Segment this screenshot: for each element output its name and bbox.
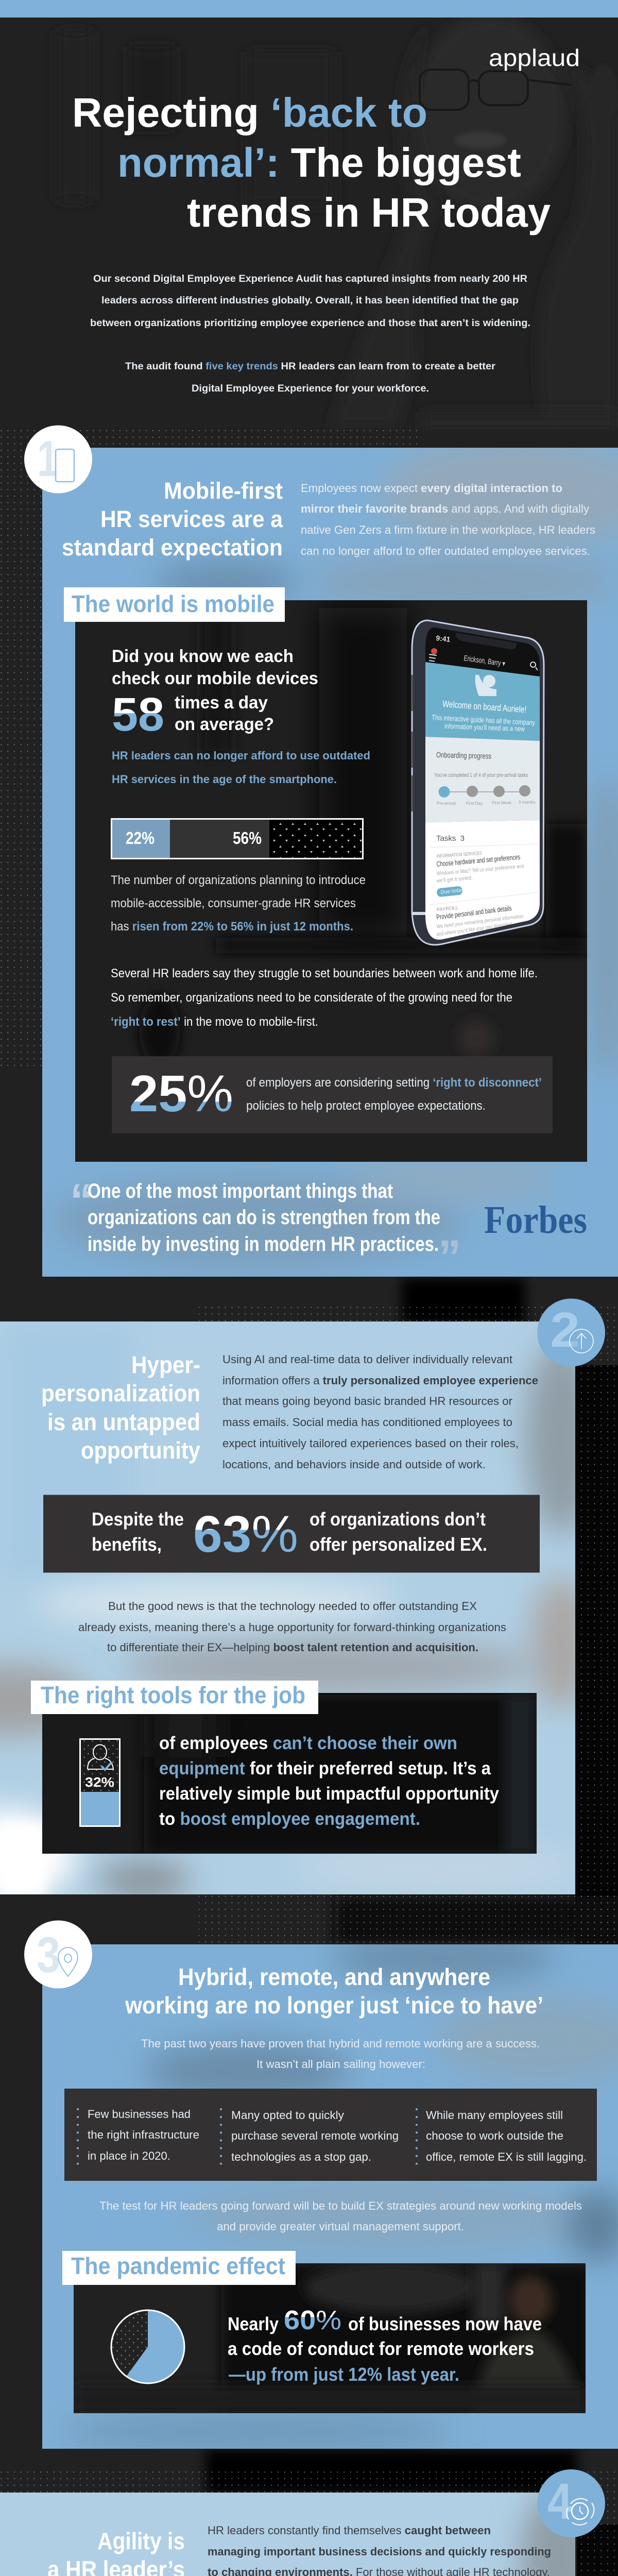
phone mockup: Due today xyxy=(440,887,465,895)
good news text: But the good news is that the technology needed to offer outstanding EX xyxy=(108,1600,477,1613)
equipment statement: of employees can’t choose their own xyxy=(159,1733,457,1753)
phone mockup xyxy=(411,620,544,948)
column 3: While many employees still xyxy=(426,2109,563,2122)
section 4 text: managing important business decisions and quickly responding xyxy=(208,2545,551,2558)
section 3 text: The past two years have proven that hybrid and remote working are a success. xyxy=(141,2037,540,2050)
intro text: leaders across different industries globally. Overall, it has been identified that the gap xyxy=(101,295,519,306)
stat explanation: The number of organizations planning to introduce xyxy=(111,873,366,887)
section 2 text xyxy=(222,1353,538,1471)
right to rest text: Several HR leaders say they struggle to set boundaries between work and home life. xyxy=(111,967,538,980)
section 2 text: that means going beyond basic branded HR resources or xyxy=(222,1395,512,1408)
tab: the right tools: The right tools for the job xyxy=(41,1682,305,1708)
pandemic statement: —up from just 12% last year. xyxy=(229,2364,459,2385)
did you know text: Did you know we each xyxy=(112,647,294,666)
right to rest text xyxy=(111,967,538,1029)
pandemic statement xyxy=(228,2306,542,2385)
phone mockup: We need your remaining personal information xyxy=(436,913,524,930)
column 2: purchase several remote working xyxy=(231,2129,399,2142)
tab: the pandemic effect: The pandemic effect xyxy=(71,2252,285,2279)
EX strategy text: and provide greater virtual management support. xyxy=(217,2220,464,2233)
logo: Forbes: Forbes xyxy=(484,1198,587,1242)
stat box: 63%: Despite the xyxy=(92,1509,184,1530)
pandemic statement: 60% xyxy=(284,2306,341,2335)
blue statement: HR services in the age of the smartphone. xyxy=(112,773,337,786)
good news text: to differentiate their EX—helping boost talent retention and acquisition. xyxy=(107,1641,478,1654)
section 2 heading: opportunity xyxy=(81,1437,200,1464)
section 1 text: can no longer afford to offer outdated employee services. xyxy=(301,545,590,557)
blue statement: HR leaders can no longer afford to use outdated xyxy=(112,749,370,762)
did you know text: check our mobile devices xyxy=(112,669,318,688)
title: trends in HR today xyxy=(187,190,551,235)
title: normal’: The biggest xyxy=(117,140,521,185)
badge: trend 2 xyxy=(537,1298,605,1366)
panel: pandemic effect xyxy=(74,2262,592,2413)
section 1 heading: Mobile-first xyxy=(164,478,283,504)
quote: “ xyxy=(70,1175,93,1227)
three-column box xyxy=(64,2089,597,2181)
phone mockup: Choose hardware and set preferences xyxy=(436,853,521,868)
pie chart: 60% xyxy=(111,2310,184,2383)
phone mockup: This interactive guide has all the company xyxy=(432,713,535,727)
did you know text: on average? xyxy=(175,715,274,734)
section 1 heading: standard expectation xyxy=(62,534,283,561)
pandemic statement: Nearly xyxy=(228,2313,279,2334)
phone mockup: PAYROLL xyxy=(436,905,459,913)
stat box: 25% xyxy=(112,1056,553,1133)
intro text: The audit found five key trends HR leaders can learn from to create a better xyxy=(125,361,496,372)
did you know text: 58 xyxy=(112,688,164,741)
icon: 32% person gauge: 32% xyxy=(85,1774,114,1790)
panel: trend 3 hybrid working xyxy=(42,1932,618,2452)
phone mockup: Welcome on board Auriele! xyxy=(442,699,527,715)
section 2 heading xyxy=(41,1351,200,1464)
phone mockup: Provide personal and bank details xyxy=(436,904,512,921)
phone mockup: we’ll get it sorted. xyxy=(436,875,473,884)
bar chart: 22% to 56% xyxy=(111,819,363,858)
intro text: between organizations prioritizing employee experience and those that aren’t is widening. xyxy=(90,318,530,329)
panel: trend 4 agility xyxy=(0,2488,603,2576)
column 2: technologies as a stop gap. xyxy=(231,2150,371,2163)
stat box: 25%: 25% xyxy=(129,1065,233,1123)
section 3 heading xyxy=(125,1963,543,2019)
stat explanation: mobile-accessible, consumer-grade HR services xyxy=(111,896,356,910)
quote: ” xyxy=(438,1231,461,1283)
section 2 heading: is an untapped xyxy=(47,1409,200,1435)
stat box: 25%: of employers are considering setting ‘right to disconnect’ xyxy=(246,1076,542,1090)
section 4 text: HR leaders constantly find themselves caught between xyxy=(208,2524,491,2537)
equipment statement: to boost employee engagement. xyxy=(159,1809,420,1829)
phone mockup: information you’ll need as a new xyxy=(444,722,525,733)
pandemic statement: a code of conduct for remote workers xyxy=(228,2338,534,2359)
section 3 text xyxy=(141,2037,540,2071)
panel: right tools for the job xyxy=(42,1693,541,1855)
bar chart: 22% to 56%: 22% xyxy=(126,828,154,848)
good news text xyxy=(78,1600,506,1654)
section 4 text xyxy=(208,2524,551,2576)
badge: trend 1: 1 xyxy=(37,430,59,487)
phone mockup: Erickson, Barry ▾ xyxy=(463,654,506,668)
right to rest text: So remember, organizations need to be considerate of the growing need for the xyxy=(111,991,512,1005)
stat box: 63%: 63% xyxy=(193,1505,298,1563)
column 3 xyxy=(426,2109,587,2163)
section 2 text: locations, and behaviors inside and outside of work. xyxy=(222,1458,486,1471)
title: Rejecting ‘back to xyxy=(72,90,427,135)
top colour bar xyxy=(0,0,618,18)
section 1 text: native Gen Zers a firm fixture in the workplace, HR leaders xyxy=(301,523,595,536)
column 1: Few businesses had xyxy=(88,2108,191,2121)
icon: 32% person gauge xyxy=(80,1739,119,1826)
EX strategy text xyxy=(99,2199,582,2233)
phone mockup: You’ve completed 1 of 4 of your pre-arrival tasks xyxy=(434,772,528,778)
phone mockup: Tasks 3 xyxy=(436,834,465,843)
did you know text: times a day xyxy=(175,693,268,713)
pandemic statement: of businesses now have xyxy=(348,2313,542,2334)
phone mockup: First Day xyxy=(466,801,483,806)
tab: the world is mobile: The world is mobile xyxy=(72,590,274,617)
column 2 xyxy=(231,2109,399,2163)
section 4 heading: Agility is xyxy=(97,2528,185,2554)
stat box: 25%: policies to help protect employee expectations. xyxy=(246,1099,486,1113)
phone mockup: Windows or Mac? Tell us your preference and xyxy=(436,863,524,877)
good news text: already exists, meaning there’s a huge opportunity for forward-thinking organizations xyxy=(78,1621,506,1634)
stat explanation xyxy=(111,873,366,934)
blue statement xyxy=(112,749,370,786)
section 1 text: Employees now expect every digital interaction to xyxy=(301,482,562,495)
column 1 xyxy=(88,2108,199,2162)
hero background photo xyxy=(57,15,618,433)
section 1 heading xyxy=(62,478,283,561)
equipment statement xyxy=(159,1733,499,1829)
section 3 text: It wasn’t all plain sailing however: xyxy=(256,2058,425,2071)
column 3: choose to work outside the xyxy=(426,2129,563,2142)
intro text: Digital Employee Experience for your workforce. xyxy=(192,383,429,394)
quote: inside by investing in modern HR practices. xyxy=(88,1233,439,1256)
stat box: 63% xyxy=(43,1495,540,1572)
logo: applaud top: applaud xyxy=(489,44,580,71)
section 3 heading: Hybrid, remote, and anywhere xyxy=(178,1963,490,1990)
section 1 text: mirror their favorite brands and apps. And with digitally xyxy=(301,502,589,515)
section 2 text: Using AI and real-time data to deliver individually relevant xyxy=(222,1353,512,1366)
badge: trend 3: 3 xyxy=(37,1926,60,1983)
equipment statement: equipment for their preferred setup. It’s a xyxy=(159,1758,491,1778)
section 4 heading xyxy=(31,2528,185,2576)
section 2 text: expect intuitively tailored experiences based on their roles, xyxy=(222,1437,519,1450)
intro text: Our second Digital Employee Experience Audit has captured insights from nearly 200 HR xyxy=(93,274,527,284)
column 1: in place in 2020. xyxy=(88,2149,170,2162)
badge: trend 2: 2 xyxy=(550,1302,580,1358)
stat box: 63%: offer personalized EX. xyxy=(310,1534,487,1555)
column 3: office, remote EX is still lagging. xyxy=(426,2150,587,2163)
did you know text xyxy=(112,647,318,741)
section 2 heading: personalization xyxy=(41,1380,200,1406)
section 2 text: information offers a truly personalized employee experience xyxy=(222,1374,538,1387)
dark background blotches xyxy=(129,1278,618,2576)
phone mockup: 9:41 xyxy=(436,634,451,643)
section 2 text: mass emails. Social media has conditioned employees to xyxy=(222,1416,512,1429)
EX strategy text: The test for HR leaders going forward will be to build EX strategies around new working models xyxy=(99,2199,582,2212)
equipment statement: relatively simple but impactful opportunity xyxy=(159,1784,499,1804)
panel: trend 2 hyper-personalization xyxy=(0,1321,597,1901)
section 3 heading: working are no longer just ‘nice to have’ xyxy=(125,1992,543,2019)
intro text xyxy=(90,274,530,394)
phone mockup: First Week xyxy=(492,801,512,805)
quote: organizations can do is strengthen from the xyxy=(88,1206,440,1229)
phone mockup: Pre-arrival xyxy=(437,801,456,806)
badge: trend 1 xyxy=(24,426,92,494)
stat box: 63%: of organizations don’t xyxy=(310,1509,486,1530)
phone mockup: and where you’d like your pay deposited. xyxy=(436,921,513,938)
badge: trend 4: 4 xyxy=(547,2473,572,2530)
quote: One of the most important things that xyxy=(88,1180,393,1202)
badge: trend 4 xyxy=(537,2469,605,2537)
panel: the world is mobile xyxy=(75,600,587,1162)
title xyxy=(72,90,551,235)
section 1 heading: HR services are a xyxy=(100,506,283,532)
phone mockup: Onboarding progress xyxy=(436,751,491,761)
column 1: the right infrastructure xyxy=(88,2128,199,2141)
panel: trend 1 mobile-first xyxy=(42,438,618,1283)
bar chart: 22% to 56%: 56% xyxy=(233,828,262,848)
stat box: 63%: benefits, xyxy=(92,1534,162,1555)
phone mockup: INFORMATION SERVICES xyxy=(436,851,482,859)
right to rest text: ‘right to rest’ in the move to mobile-first. xyxy=(111,1015,318,1029)
column 2: Many opted to quickly xyxy=(231,2109,344,2122)
badge: trend 3 xyxy=(24,1921,92,1989)
quote xyxy=(70,1175,461,1283)
section 2 heading: Hyper- xyxy=(131,1351,200,1378)
stat explanation: has risen from 22% to 56% in just 12 months. xyxy=(111,920,353,934)
phone mockup: 3 months xyxy=(519,800,536,805)
section 1 text xyxy=(301,482,595,557)
